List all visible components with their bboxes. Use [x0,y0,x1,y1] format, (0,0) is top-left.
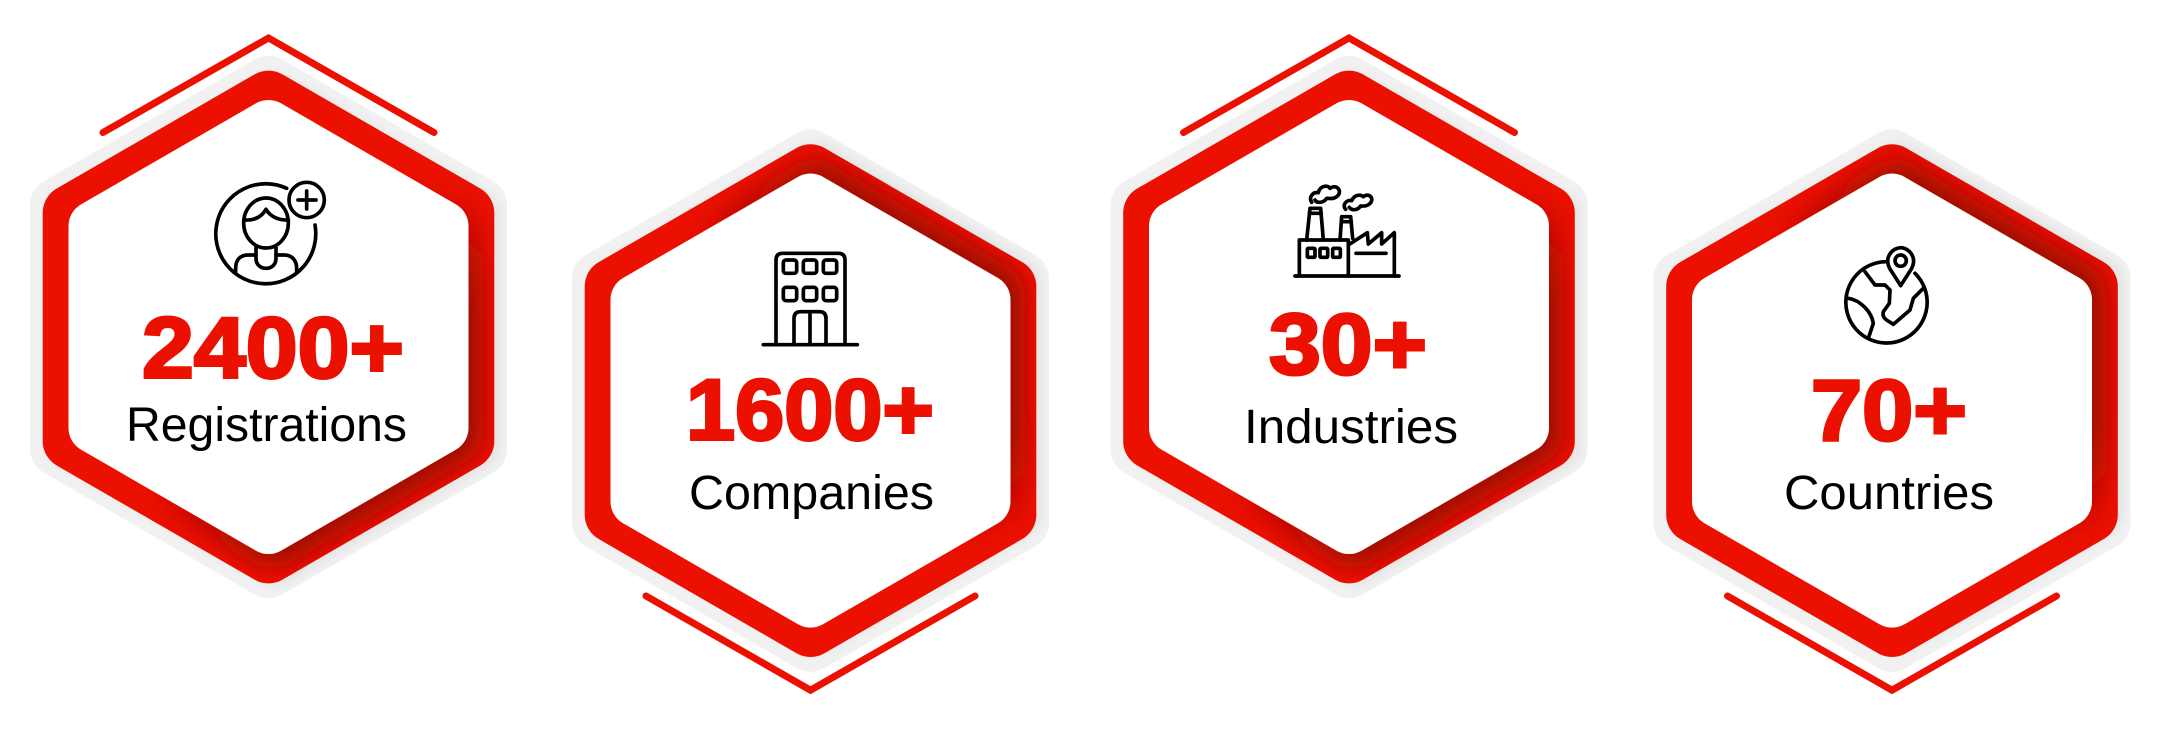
panel: industries [1110,38,1588,598]
panel: registrations [30,38,507,598]
value: 2400+: 2400+ [142,300,404,396]
panel: companies [572,129,1049,690]
hexagon frame: registrations [30,56,507,598]
panel: countries [1654,129,2130,690]
label: Countries: Countries [1784,467,1994,520]
bottom chevron: companies [646,596,975,690]
label: Companies: Companies [689,467,934,520]
label: Registrations: Registrations [126,399,407,452]
value: 70+: 70+ [1811,363,1967,459]
icon: factory [1295,186,1399,276]
hexagon frame: industries [1110,56,1588,598]
hexagon frame: countries [1654,129,2130,672]
icon: globe with map pin [1846,248,1927,343]
hexagon frame: companies [572,129,1049,672]
value: 30+: 30+ [1269,297,1427,393]
icon: office building [763,253,857,345]
top chevron: industries [1184,38,1514,132]
top chevron: registrations [103,38,434,132]
label: Industries: Industries [1244,401,1458,454]
value: 1600+: 1600+ [686,362,934,458]
icon: person with plus [216,182,324,284]
bottom chevron: countries [1728,596,2056,690]
